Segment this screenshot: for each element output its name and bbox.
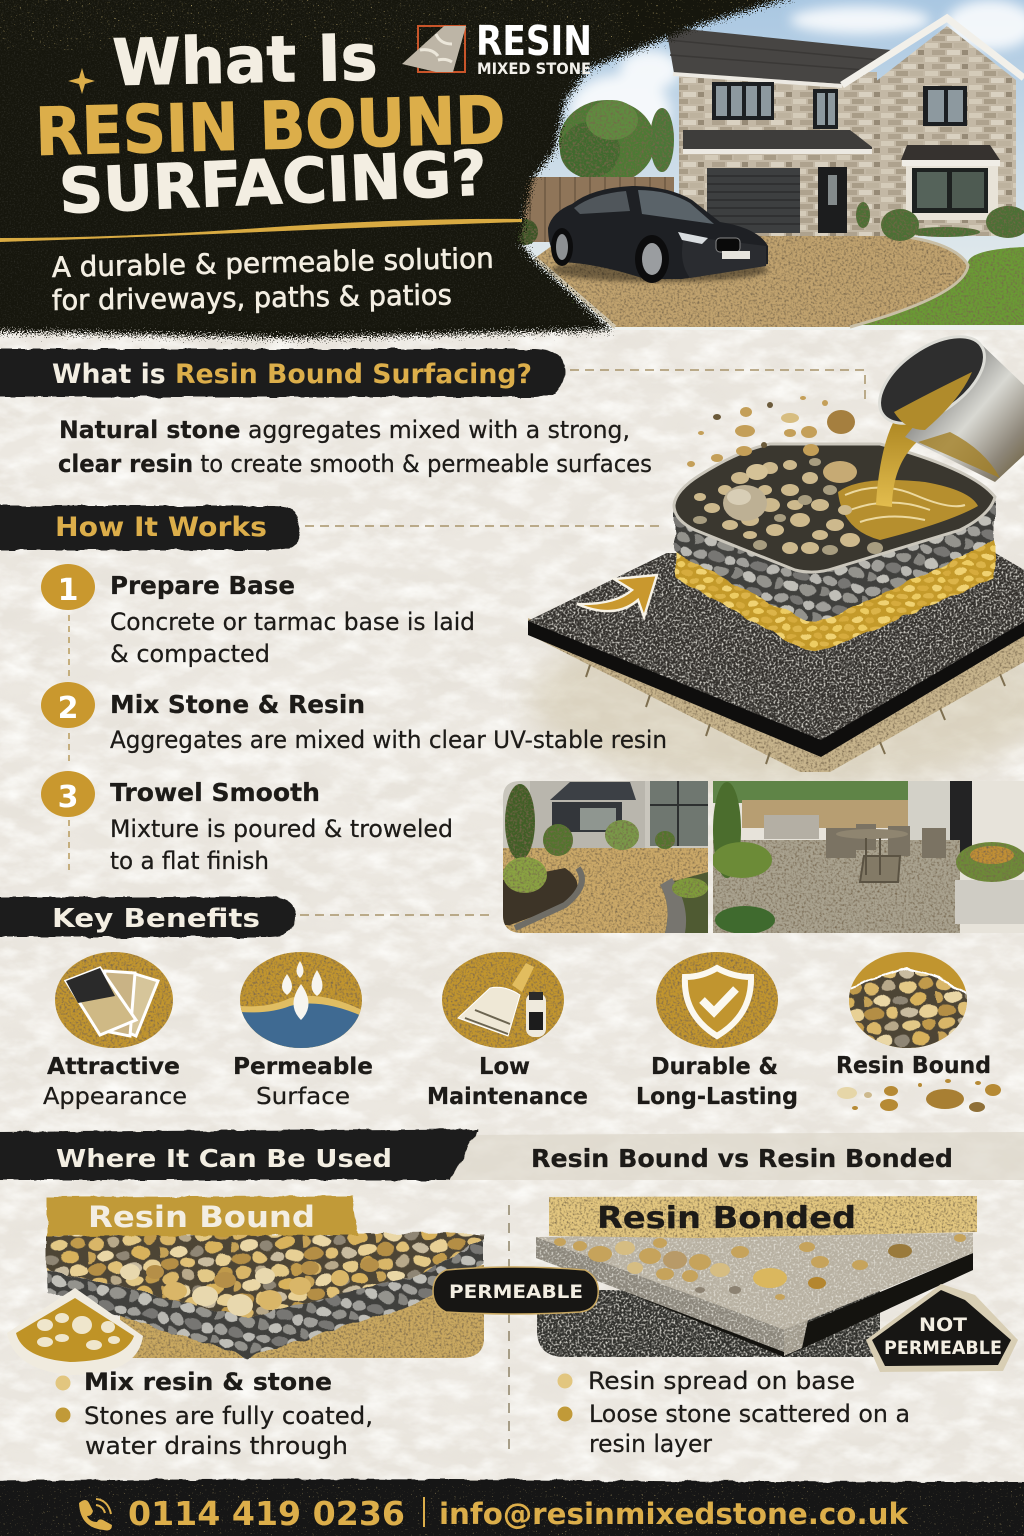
benefit: durable: Durable & <box>651 1054 778 1080</box>
comparison heading: Resin Bound vs Resin Bonded <box>531 1144 953 1173</box>
badge: not permeable: NOT <box>919 1314 967 1336</box>
panel: resin bound: Stones are fully coated, <box>84 1402 373 1430</box>
benefit: permeable surface: Surface <box>256 1084 350 1110</box>
resin pool <box>838 480 978 540</box>
benefit: durable: Long-Lasting <box>636 1084 798 1110</box>
asphalt slab <box>528 553 1024 757</box>
footer <box>0 1479 1024 1536</box>
logo <box>402 17 592 78</box>
section heading: how it works <box>0 506 300 550</box>
pouring resin <box>876 412 940 507</box>
section heading: key benefits: Key Benefits <box>52 904 260 934</box>
shrubs by driveway <box>500 219 576 325</box>
logo: MIXED STONE <box>477 59 591 78</box>
badge: permeable <box>433 1267 598 1314</box>
tub rim <box>674 444 995 572</box>
photo: garden path <box>503 781 708 933</box>
panel: resin bonded <box>536 1196 977 1458</box>
step 3: Trowel Smooth <box>110 778 320 807</box>
step 1: & compacted <box>110 640 270 668</box>
panel: resin bonded: Loose stone scattered on a <box>589 1400 910 1428</box>
gold underline <box>0 219 522 242</box>
panel: resin bound: Resin Bound <box>88 1200 315 1234</box>
driveway <box>535 232 968 327</box>
title <box>34 21 506 228</box>
definition text <box>58 416 652 478</box>
step 1: 1 <box>58 573 78 608</box>
definition text: Natural stone aggregates mixed with a strong, <box>59 416 630 444</box>
panel: resin bonded: resin layer <box>589 1430 712 1458</box>
benefit: attractive appearance <box>43 952 187 1110</box>
subtitle: A durable & permeable solution <box>51 242 494 284</box>
footer: info@resinmixedstone.co.uk <box>439 1497 909 1531</box>
panel: resin bound: Mix resin & stone <box>84 1368 332 1396</box>
section heading: what is: What is Resin Bound Surfacing? <box>52 359 532 390</box>
title: SURFACING? <box>57 136 488 228</box>
lawn <box>850 247 1024 325</box>
section heading: key benefits <box>0 897 296 937</box>
section heading: where it can be used <box>0 1129 1024 1180</box>
badge: not permeable: PERMEABLE <box>884 1337 1002 1359</box>
icon: phone <box>79 1500 112 1530</box>
icon: bowl of stones <box>7 1288 143 1375</box>
badge: permeable: PERMEABLE <box>449 1281 583 1303</box>
step 2: Aggregates are mixed with clear UV-stable resin <box>110 726 667 754</box>
step 3: 3 <box>58 780 78 815</box>
definition text: clear resin to create smooth & permeable surfaces <box>58 450 652 478</box>
footer: 0114 419 0236 <box>128 1494 405 1533</box>
title: RESIN BOUND <box>34 82 506 171</box>
header texture <box>0 0 800 330</box>
subtitle <box>51 242 494 317</box>
section heading: what is <box>0 349 565 397</box>
bucket <box>864 319 1024 482</box>
benefit: permeable surface: Permeable <box>233 1054 373 1080</box>
panel: resin bonded: Resin Bonded <box>597 1201 856 1236</box>
step 2: 2 <box>58 691 78 726</box>
tree <box>559 100 674 184</box>
benefit: low maintenance: Maintenance <box>427 1084 588 1110</box>
panel: resin bonded: Resin spread on base <box>588 1367 855 1395</box>
badge: not permeable <box>866 1284 1018 1372</box>
benefit: resin bound: Resin Bound <box>836 1053 991 1079</box>
kerb stones <box>528 618 1024 772</box>
step 1 <box>41 564 475 668</box>
benefit: durable <box>636 952 798 1110</box>
step 2: Mix Stone & Resin <box>110 690 365 719</box>
panel: resin bound <box>7 1196 484 1460</box>
step 1: Concrete or tarmac base is laid <box>110 608 475 636</box>
step 2 <box>41 682 667 754</box>
step 3: Mixture is poured & troweled <box>110 815 453 843</box>
car <box>548 186 768 283</box>
hero photo: house and driveway <box>480 0 1024 330</box>
section heading: where it can be used: Where It Can Be Used <box>56 1144 392 1173</box>
title: What Is <box>112 21 378 101</box>
large foreground stones <box>120 1258 379 1316</box>
bullets <box>56 1376 70 1390</box>
star icon <box>68 68 95 94</box>
pale gravel ground <box>530 610 1024 790</box>
benefit: attractive appearance: Attractive <box>47 1054 180 1080</box>
illustration: resin pour over layered base <box>528 319 1024 790</box>
benefit: low maintenance: Low <box>479 1054 530 1080</box>
photo: patio <box>712 781 1024 934</box>
gold layer <box>676 530 995 651</box>
scattered stones <box>554 1234 966 1300</box>
header dark panel <box>0 0 880 338</box>
benefit: attractive appearance: Appearance <box>43 1084 187 1110</box>
step 1: Prepare Base <box>110 571 295 600</box>
subtitle: for driveways, paths & patios <box>52 278 452 317</box>
gold arrow <box>577 575 657 617</box>
stones in tub <box>693 458 883 555</box>
flying stones <box>687 396 855 467</box>
section heading: how it works: How It Works <box>55 512 267 543</box>
house <box>666 18 1024 241</box>
fence <box>522 177 674 242</box>
step 3: to a flat finish <box>110 847 269 875</box>
panel: resin bound: water drains through <box>85 1432 348 1460</box>
stone wall <box>674 497 995 621</box>
logo: RESIN <box>476 17 592 65</box>
step 3 <box>41 771 453 875</box>
bullets <box>558 1374 572 1388</box>
benefit: resin bound <box>836 952 1001 1112</box>
benefit: low maintenance <box>427 952 588 1110</box>
benefit: permeable surface <box>233 952 373 1110</box>
